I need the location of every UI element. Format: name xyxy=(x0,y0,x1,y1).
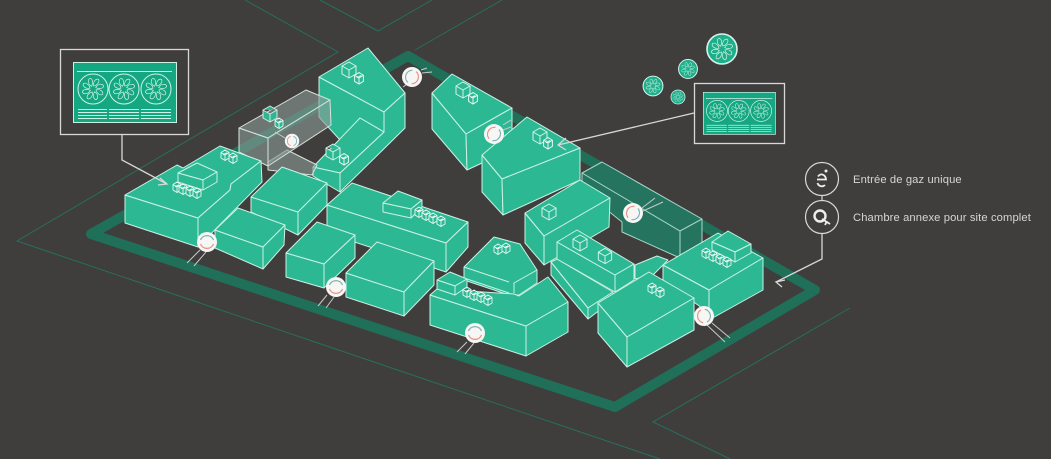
building: south block B xyxy=(346,242,434,316)
icon: single gas inlet xyxy=(806,162,838,196)
building: ghost transparent block xyxy=(239,90,331,175)
icon: annex chamber xyxy=(806,200,838,234)
building: centre tall block xyxy=(482,117,580,215)
building: west long block with rooftop unit xyxy=(125,146,262,247)
building: south tower section xyxy=(464,237,537,295)
legend xyxy=(776,162,1032,287)
building: east block with rooftop unit xyxy=(663,231,763,320)
legend arrow xyxy=(776,234,822,287)
rooftop unit xyxy=(178,163,217,190)
floating fans xyxy=(643,34,737,104)
legend label: annex chamber: Chambre annexe pour site complet xyxy=(853,212,1032,224)
callout arrow west xyxy=(122,134,167,185)
valves xyxy=(197,64,716,343)
building: south-east block xyxy=(598,272,694,367)
building: north-centre block xyxy=(432,74,512,170)
building: east ridge block xyxy=(557,230,634,292)
building: small south-west block xyxy=(215,208,285,269)
site boundary lines xyxy=(17,0,850,459)
callout arrow east xyxy=(558,113,694,150)
building: south block A xyxy=(286,222,355,288)
callout: fan unit east xyxy=(558,84,784,150)
road loop xyxy=(91,56,815,407)
building: south main block xyxy=(430,272,568,356)
legend label: single gas inlet: Entrée de gaz unique xyxy=(853,174,962,186)
callout: fan unit west xyxy=(60,50,188,185)
rooftop unit xyxy=(383,191,422,218)
building: mid-west block xyxy=(251,167,327,235)
rooftop unit xyxy=(712,231,751,262)
building: tall north block with wing xyxy=(313,48,405,192)
rooftop unit xyxy=(437,272,467,295)
building: east-centre block xyxy=(525,180,610,265)
valve pipes xyxy=(187,68,730,354)
building: long central block xyxy=(327,183,468,272)
building: link piece xyxy=(635,256,668,279)
building: wedge block xyxy=(551,259,613,319)
building: dark annex xyxy=(582,162,702,258)
